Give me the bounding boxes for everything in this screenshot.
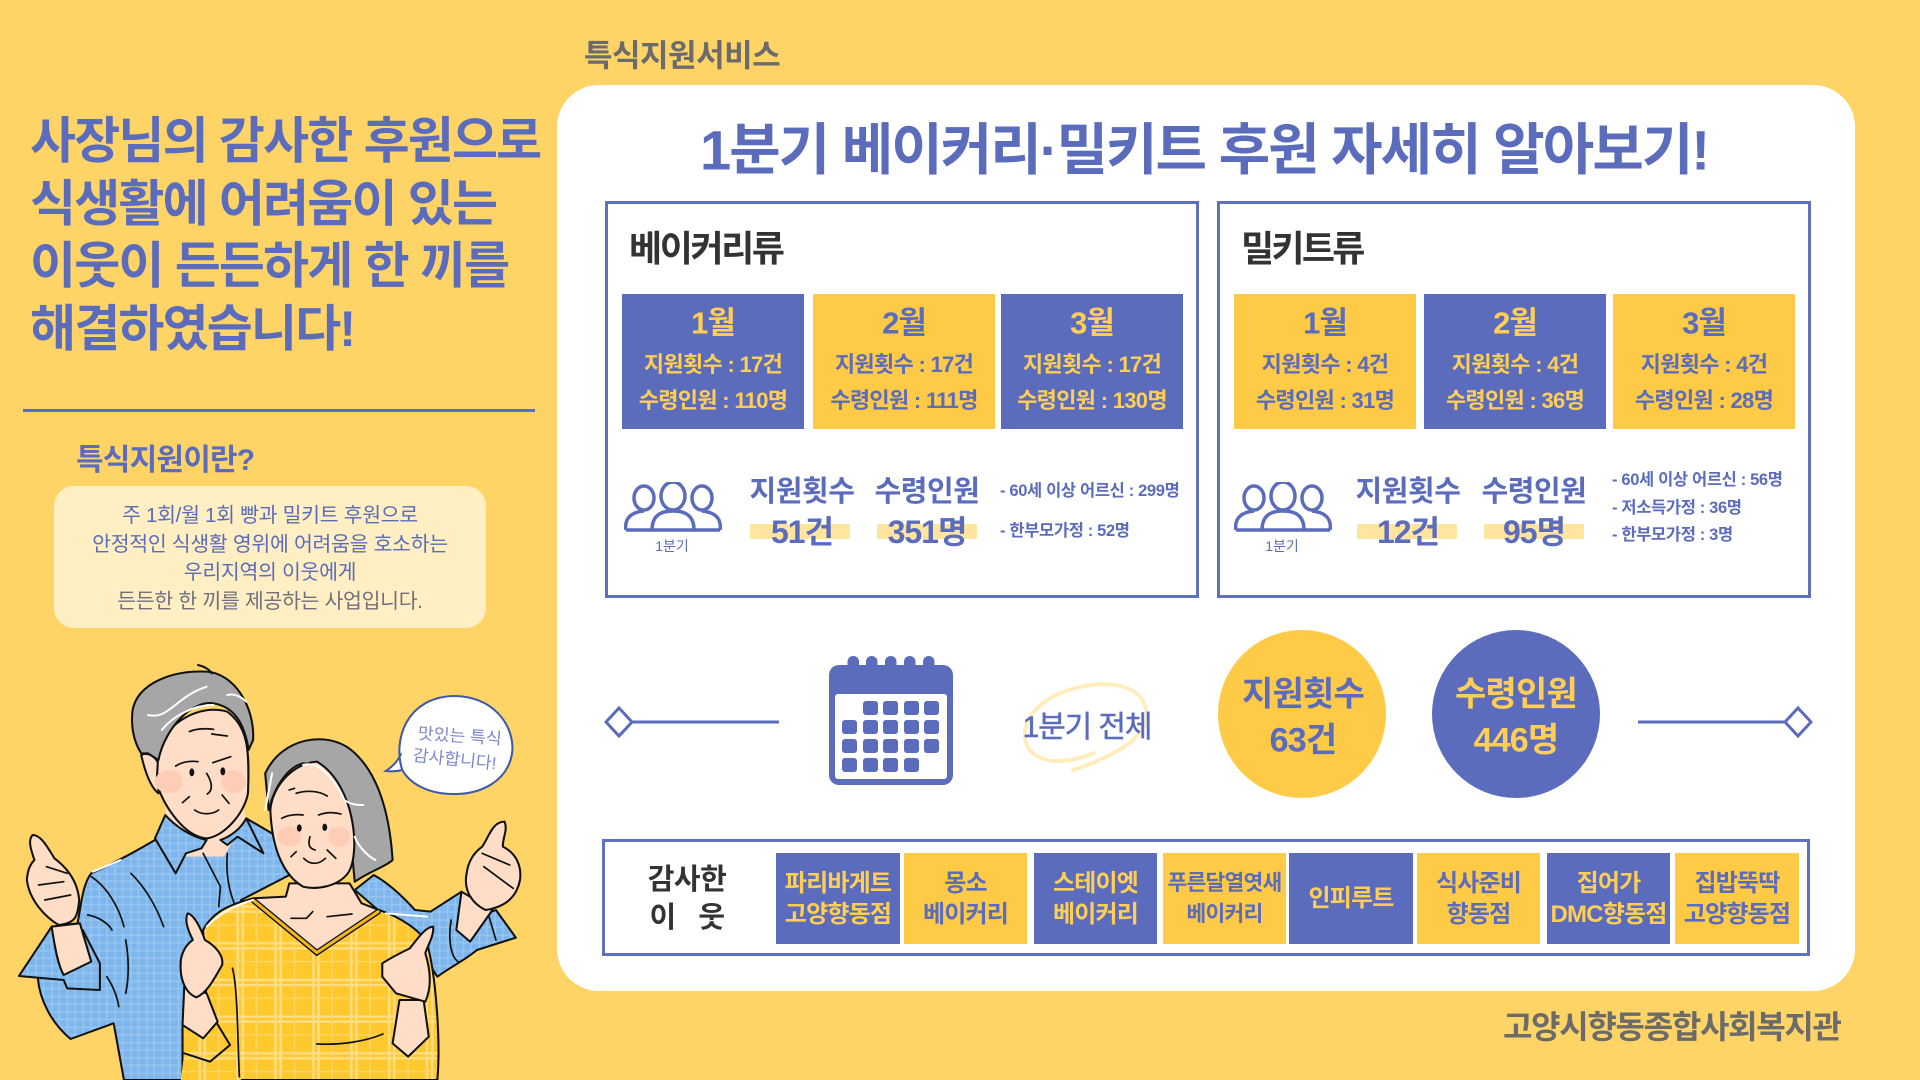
March: 지원횟수 : 4건 bbox=[1641, 352, 1767, 377]
speech bubble: 맛있는 특식 bbox=[417, 724, 502, 748]
subheading: 특식지원이란: 특식지원이란? bbox=[76, 444, 254, 477]
stat: recipients: 351명 bbox=[888, 514, 966, 550]
connector right with diamond bbox=[1638, 706, 1813, 738]
shop 1: 파리바게트 bbox=[785, 870, 891, 896]
shop 5: 인피루트 bbox=[1308, 884, 1394, 912]
January bbox=[622, 294, 804, 429]
circle: total recipients: 446명 bbox=[1474, 722, 1558, 760]
speech bubble bbox=[386, 696, 512, 794]
February: 2월 bbox=[882, 306, 926, 340]
main title: 1분기 베이커리·밀키트 후원 자세히 알아보기! bbox=[700, 118, 1708, 182]
shop 2: 베이커리 bbox=[923, 900, 1008, 928]
panel: bakery bbox=[605, 201, 1199, 598]
stat: support count: 51건 bbox=[771, 514, 833, 550]
panel: thank-you neighbours bbox=[602, 839, 1810, 956]
connector left with diamond bbox=[604, 706, 779, 738]
stat: support count: 지원횟수 bbox=[749, 476, 855, 508]
divider bbox=[23, 409, 535, 412]
circle: total support: 지원횟수 bbox=[1242, 676, 1364, 714]
January: 1월 bbox=[1303, 306, 1347, 340]
recipient breakdown bbox=[1612, 470, 1783, 544]
February bbox=[813, 294, 995, 429]
stat: recipients: 수령인원 bbox=[1481, 476, 1587, 508]
March bbox=[1613, 294, 1795, 429]
shop 6 bbox=[1417, 853, 1540, 944]
recipient breakdown: - 60세 이상 어르신 : 299명 bbox=[1000, 482, 1179, 500]
February: 지원횟수 : 4건 bbox=[1452, 352, 1578, 377]
February: 수령인원 : 36명 bbox=[1446, 388, 1584, 413]
February bbox=[1424, 294, 1606, 429]
neighbours label: 감사한 이 웃 bbox=[648, 864, 726, 934]
recipient breakdown bbox=[1000, 482, 1179, 540]
label: whole quarter with scribble bbox=[1022, 682, 1151, 772]
stat: support count: 지원횟수 bbox=[1355, 476, 1461, 508]
shop 8 bbox=[1675, 853, 1799, 944]
icon: people: 1분기 bbox=[1265, 538, 1299, 554]
shop 2 bbox=[904, 853, 1027, 944]
headline: 해결하였습니다! bbox=[30, 300, 354, 356]
definition text box: 안정적인 식생활 영위에 어려움을 호소하는 bbox=[92, 533, 448, 556]
February: 2월 bbox=[1493, 306, 1537, 340]
circle: total support: 63건 bbox=[1270, 722, 1336, 760]
shop 4 bbox=[1163, 853, 1286, 944]
icon: calendar bbox=[829, 656, 953, 785]
stat: support count: 12건 bbox=[1377, 514, 1439, 550]
shop 4: 푸른달열엿새 bbox=[1168, 870, 1281, 894]
stat: support count bbox=[749, 476, 855, 550]
March: 수령인원 : 130명 bbox=[1017, 388, 1167, 413]
shop 7: DMC향동점 bbox=[1550, 900, 1667, 928]
shop 1: 고양향동점 bbox=[785, 900, 891, 928]
circle: total recipients: 수령인원 bbox=[1455, 676, 1577, 714]
January: 지원횟수 : 4건 bbox=[1262, 352, 1388, 377]
January: 지원횟수 : 17건 bbox=[644, 352, 782, 377]
January: 수령인원 : 110명 bbox=[639, 388, 787, 413]
footer organisation: 고양시향동종합사회복지관 bbox=[1503, 1009, 1841, 1045]
stat: support count bbox=[1355, 476, 1461, 550]
circle: total support bbox=[1218, 630, 1386, 798]
icon: people: 1분기 bbox=[655, 538, 689, 554]
shop 3: 스테이엣 bbox=[1053, 870, 1138, 896]
definition text box: 우리지역의 이웃에게 bbox=[184, 561, 356, 584]
recipient breakdown: - 60세 이상 어르신 : 56명 bbox=[1612, 471, 1783, 489]
March: 지원횟수 : 17건 bbox=[1023, 352, 1161, 377]
shop 3: 베이커리 bbox=[1053, 900, 1138, 928]
illustration: senior couple with speech bubble bbox=[18, 664, 522, 1080]
shop 5 bbox=[1289, 853, 1413, 944]
shop 4: 베이커리 bbox=[1187, 902, 1262, 926]
label: whole quarter with scribble: 1분기 전체 bbox=[1023, 711, 1151, 744]
March: 3월 bbox=[1682, 306, 1726, 340]
recipient breakdown: - 한부모가정 : 52명 bbox=[1000, 522, 1130, 540]
February: 지원횟수 : 17건 bbox=[835, 352, 973, 377]
stat: recipients: 수령인원 bbox=[874, 476, 980, 508]
shop 7 bbox=[1547, 853, 1670, 944]
shop 8: 집밥뚝딱 bbox=[1694, 870, 1780, 896]
speech bubble: 감사합니다! bbox=[412, 746, 497, 773]
February: 수령인원 : 111명 bbox=[830, 388, 978, 413]
March: 3월 bbox=[1070, 306, 1114, 340]
shop 8: 고양향동점 bbox=[1684, 900, 1790, 928]
recipient breakdown: - 저소득가정 : 36명 bbox=[1612, 499, 1742, 517]
section label: 특식지원서비스 bbox=[584, 38, 780, 74]
bakery heading: 베이커리류 bbox=[629, 228, 783, 269]
shop 2: 몽소 bbox=[944, 870, 987, 896]
definition text box: 든든한 한 끼를 제공하는 사업입니다. bbox=[117, 590, 423, 613]
March: 수령인원 : 28명 bbox=[1635, 388, 1773, 413]
circle: total recipients bbox=[1432, 630, 1600, 798]
shop 3 bbox=[1034, 853, 1157, 944]
stat: recipients bbox=[874, 476, 980, 550]
headline: 이웃이 든든하게 한 끼를 bbox=[30, 238, 508, 294]
shop 1 bbox=[776, 853, 900, 944]
shop 7: 집어가 bbox=[1577, 870, 1640, 896]
shop 6: 향동점 bbox=[1447, 900, 1510, 928]
headline bbox=[30, 113, 540, 356]
definition text box: 주 1회/월 1회 빵과 밀키트 후원으로 bbox=[122, 504, 418, 527]
January bbox=[1234, 294, 1416, 429]
January: 수령인원 : 31명 bbox=[1256, 388, 1394, 413]
man shirt bbox=[38, 817, 293, 1080]
panel: meal kit bbox=[1217, 201, 1811, 598]
shop 6: 식사준비 bbox=[1436, 870, 1521, 896]
meal kit heading: 밀키트류 bbox=[1241, 228, 1363, 269]
January: 1월 bbox=[691, 306, 735, 340]
headline: 사장님의 감사한 후원으로 bbox=[30, 113, 540, 169]
white main panel bbox=[557, 85, 1855, 991]
definition text box bbox=[54, 486, 486, 628]
headline: 식생활에 어려움이 있는 bbox=[30, 176, 496, 232]
stat: recipients: 95명 bbox=[1503, 514, 1565, 550]
March bbox=[1001, 294, 1183, 429]
stat: recipients bbox=[1481, 476, 1587, 550]
faces bbox=[176, 729, 341, 863]
recipient breakdown: - 한부모가정 : 3명 bbox=[1612, 526, 1733, 544]
icon: people bbox=[624, 482, 722, 554]
icon: people bbox=[1234, 482, 1332, 554]
